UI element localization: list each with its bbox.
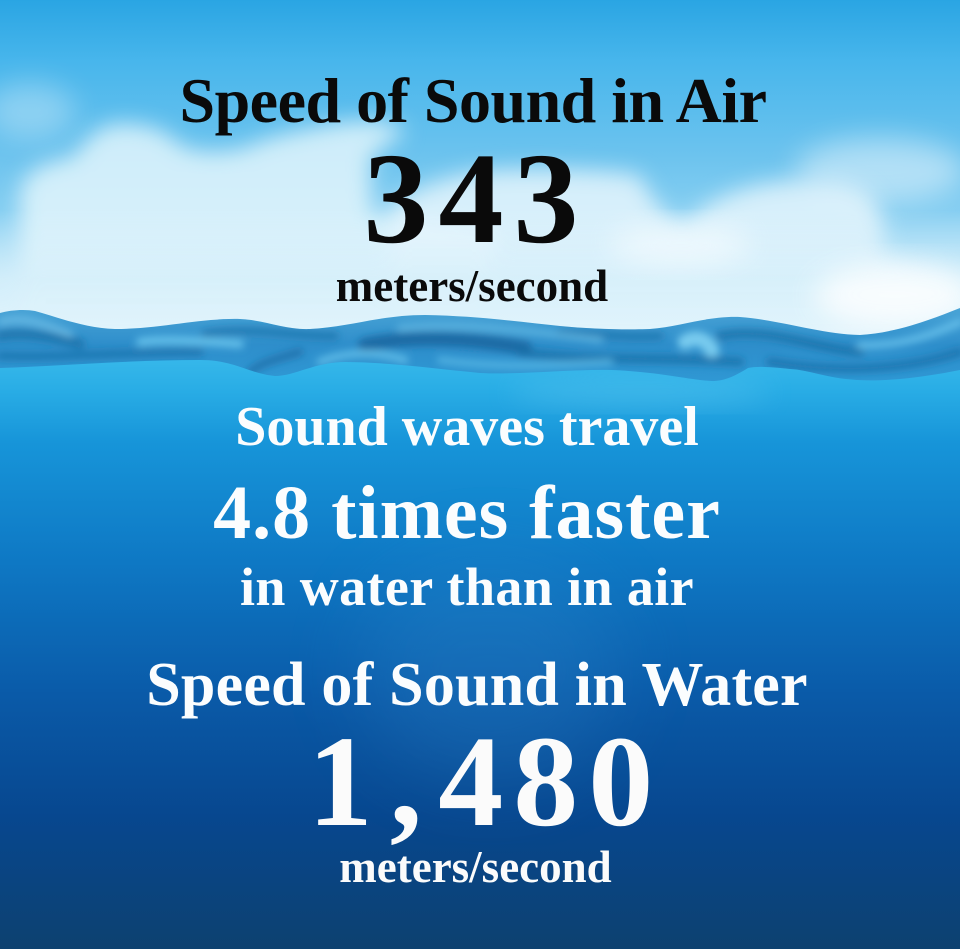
unit: air speed: meters/second [336,261,608,311]
heading: speed of sound in water: Speed of Sound in Water [146,651,808,719]
number: 343: 343 [364,127,588,271]
text: sound waves travel: Sound waves travel [235,396,699,458]
callout: 4.8 times faster: 4.8 times faster [213,471,721,555]
unit: water speed: meters/second [339,842,612,892]
text: in water than in air: in water than in air [240,557,694,617]
number: 1,480: 1,480 [308,710,663,854]
wave band [0,308,960,381]
heading: speed of sound in air: Speed of Sound in Air [179,65,767,136]
